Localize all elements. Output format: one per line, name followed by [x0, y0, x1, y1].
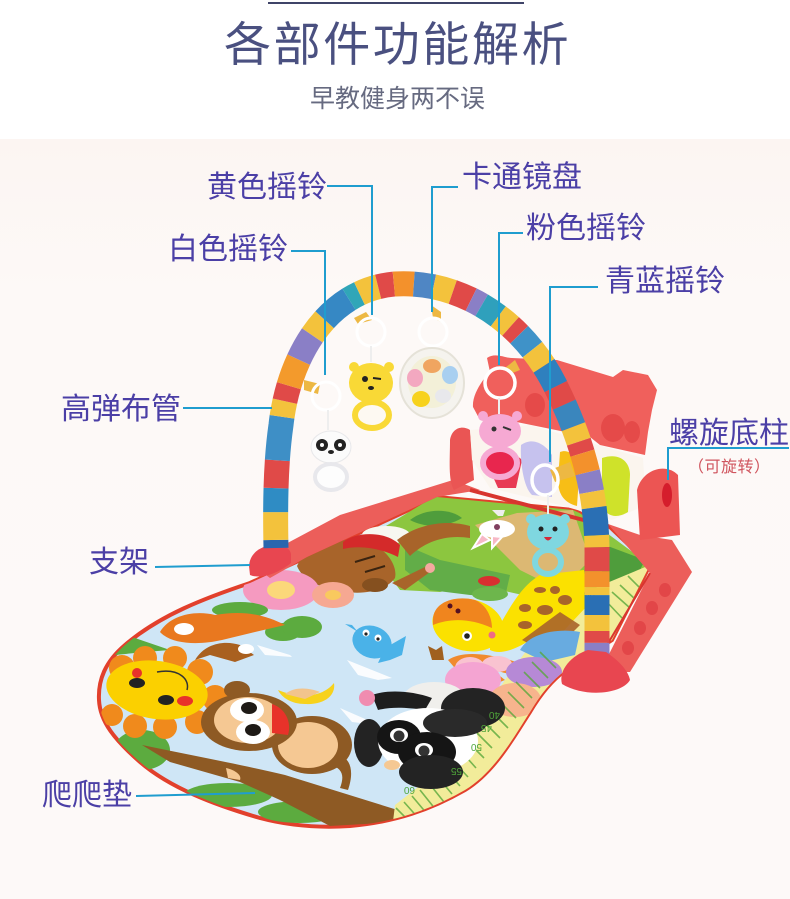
- cartoon mirror disc: [400, 318, 464, 418]
- label: spiral base post: 螺旋底柱: [669, 417, 789, 450]
- mat: mushroom and bush: [472, 576, 508, 601]
- label: cyan rattle: [550, 265, 725, 462]
- mat: branch: [142, 745, 404, 826]
- mat: green meadow: [383, 497, 645, 594]
- mat: bear: [297, 534, 435, 593]
- mat: ruler ticks: [396, 576, 642, 824]
- label: cartoon mirror: 卡通镜盘: [462, 161, 582, 194]
- fabric loops: [304, 305, 575, 482]
- label: white rattle: 白色摇铃: [168, 233, 288, 266]
- header rule: [268, 2, 524, 4]
- mat: ruler numbers: 40: [488, 709, 500, 720]
- mat: flowers: [243, 570, 354, 610]
- piano: right post: [637, 469, 680, 540]
- mat: ruler numbers: 55: [450, 765, 462, 776]
- mat: rabbit: [473, 510, 515, 548]
- mat: ruler strip: [392, 565, 650, 830]
- right foot: [561, 650, 630, 693]
- label: stand: 支架: [89, 546, 149, 579]
- label: white rattle: [168, 233, 325, 375]
- label: elastic tube: 高弹布管: [61, 393, 181, 426]
- mat: clouds: [257, 645, 392, 725]
- arch tube: [276, 284, 597, 655]
- pink rattle: [478, 368, 522, 477]
- subtitle: 早教健身两不误: [310, 85, 485, 113]
- label: pink rattle: [499, 212, 646, 365]
- piano: red roof: [473, 355, 657, 455]
- mat: panda: [354, 682, 505, 789]
- mat: bird: [345, 624, 406, 663]
- yellow tiger rattle: [349, 318, 394, 428]
- mat: squirrel and dog: [160, 613, 285, 662]
- label: cyan rattle: 青蓝摇铃: [605, 265, 725, 298]
- mat: giraffe: [427, 570, 588, 662]
- piano panel: [450, 355, 680, 540]
- mat: ruler numbers: 60: [403, 784, 415, 795]
- play mat: [99, 495, 650, 830]
- blue rattle: [526, 465, 570, 574]
- stand: left foot: [249, 545, 291, 577]
- label: yellow rattle: [207, 171, 372, 315]
- label: pink rattle: 粉色摇铃: [526, 212, 646, 245]
- mat: sun: [101, 646, 228, 739]
- mat: ruler numbers: 0: [603, 546, 613, 558]
- mat: ruler numbers: 45: [480, 722, 492, 733]
- mat: ruler numbers: 50: [470, 741, 482, 752]
- mat: trees and foliage: [114, 602, 342, 823]
- mat: monkey: [201, 681, 352, 790]
- mat: ruler numbers: [403, 546, 613, 795]
- mat: white tree hollow: [362, 526, 410, 544]
- label: play mat: [42, 779, 255, 812]
- title: 各部件功能解析: [224, 18, 571, 71]
- label: cartoon mirror: [432, 161, 582, 312]
- piano: keys: [490, 441, 630, 516]
- label: spiral base post: [668, 417, 789, 480]
- mat: ruler numbers: 30: [583, 587, 595, 598]
- mat: star and pink balloon: [428, 646, 562, 717]
- mat: tree branch top: [397, 523, 470, 556]
- white rattle: [311, 382, 351, 490]
- label: spiral base post: （可旋转）: [688, 458, 771, 476]
- label: play mat: 爬爬垫: [42, 779, 132, 812]
- piano: left post: [450, 428, 474, 490]
- piano: white key panel: [470, 425, 646, 520]
- label: yellow rattle: 黄色摇铃: [207, 171, 327, 204]
- stand frame: [249, 480, 692, 672]
